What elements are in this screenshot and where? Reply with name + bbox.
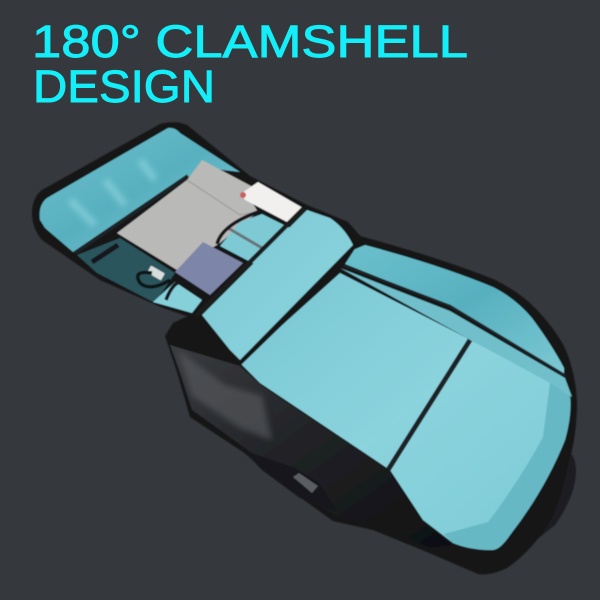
- backpack: [32, 122, 577, 574]
- upper zipper seam: [342, 265, 566, 376]
- lower wall lining: [340, 268, 572, 397]
- panel highlight: [178, 350, 272, 440]
- pen: [228, 228, 262, 248]
- pocket binding: [166, 212, 258, 300]
- zipper pull: [293, 473, 318, 493]
- title: [32, 16, 468, 112]
- title: DESIGN: [33, 61, 215, 112]
- cable bundle: [138, 266, 170, 287]
- side straps: [530, 452, 576, 545]
- front pouch lining: [202, 210, 353, 360]
- back lining: [40, 128, 240, 252]
- shell exterior: [165, 236, 577, 574]
- white power tube: [240, 182, 303, 222]
- pouch top strap: [196, 208, 304, 316]
- charger plug: [147, 266, 165, 280]
- title: 180° CLAMSHELL: [32, 16, 468, 67]
- tube cap: [240, 192, 246, 198]
- felt sleeve: [117, 160, 258, 270]
- camo front panel: [170, 345, 452, 548]
- lid lining: [40, 128, 353, 360]
- main compartment lining: [240, 245, 572, 550]
- main compartment shell: [165, 236, 577, 574]
- lid shell: [32, 122, 362, 366]
- cable: [138, 272, 170, 287]
- floor lining: [240, 273, 570, 550]
- mesh zipper: [92, 245, 118, 262]
- upper wall lining: [345, 245, 564, 376]
- mesh pocket: [77, 238, 175, 303]
- power bank: [175, 242, 243, 295]
- front handle: [243, 450, 338, 512]
- lining fold shading: [70, 160, 155, 225]
- pocket teal panels: [153, 282, 202, 313]
- pen slot panels: [220, 214, 290, 268]
- rim lining: [444, 383, 570, 550]
- felt flap edge: [187, 180, 258, 215]
- tube body: [242, 182, 303, 222]
- upper strap: [75, 176, 188, 253]
- center divider strap: [388, 340, 470, 470]
